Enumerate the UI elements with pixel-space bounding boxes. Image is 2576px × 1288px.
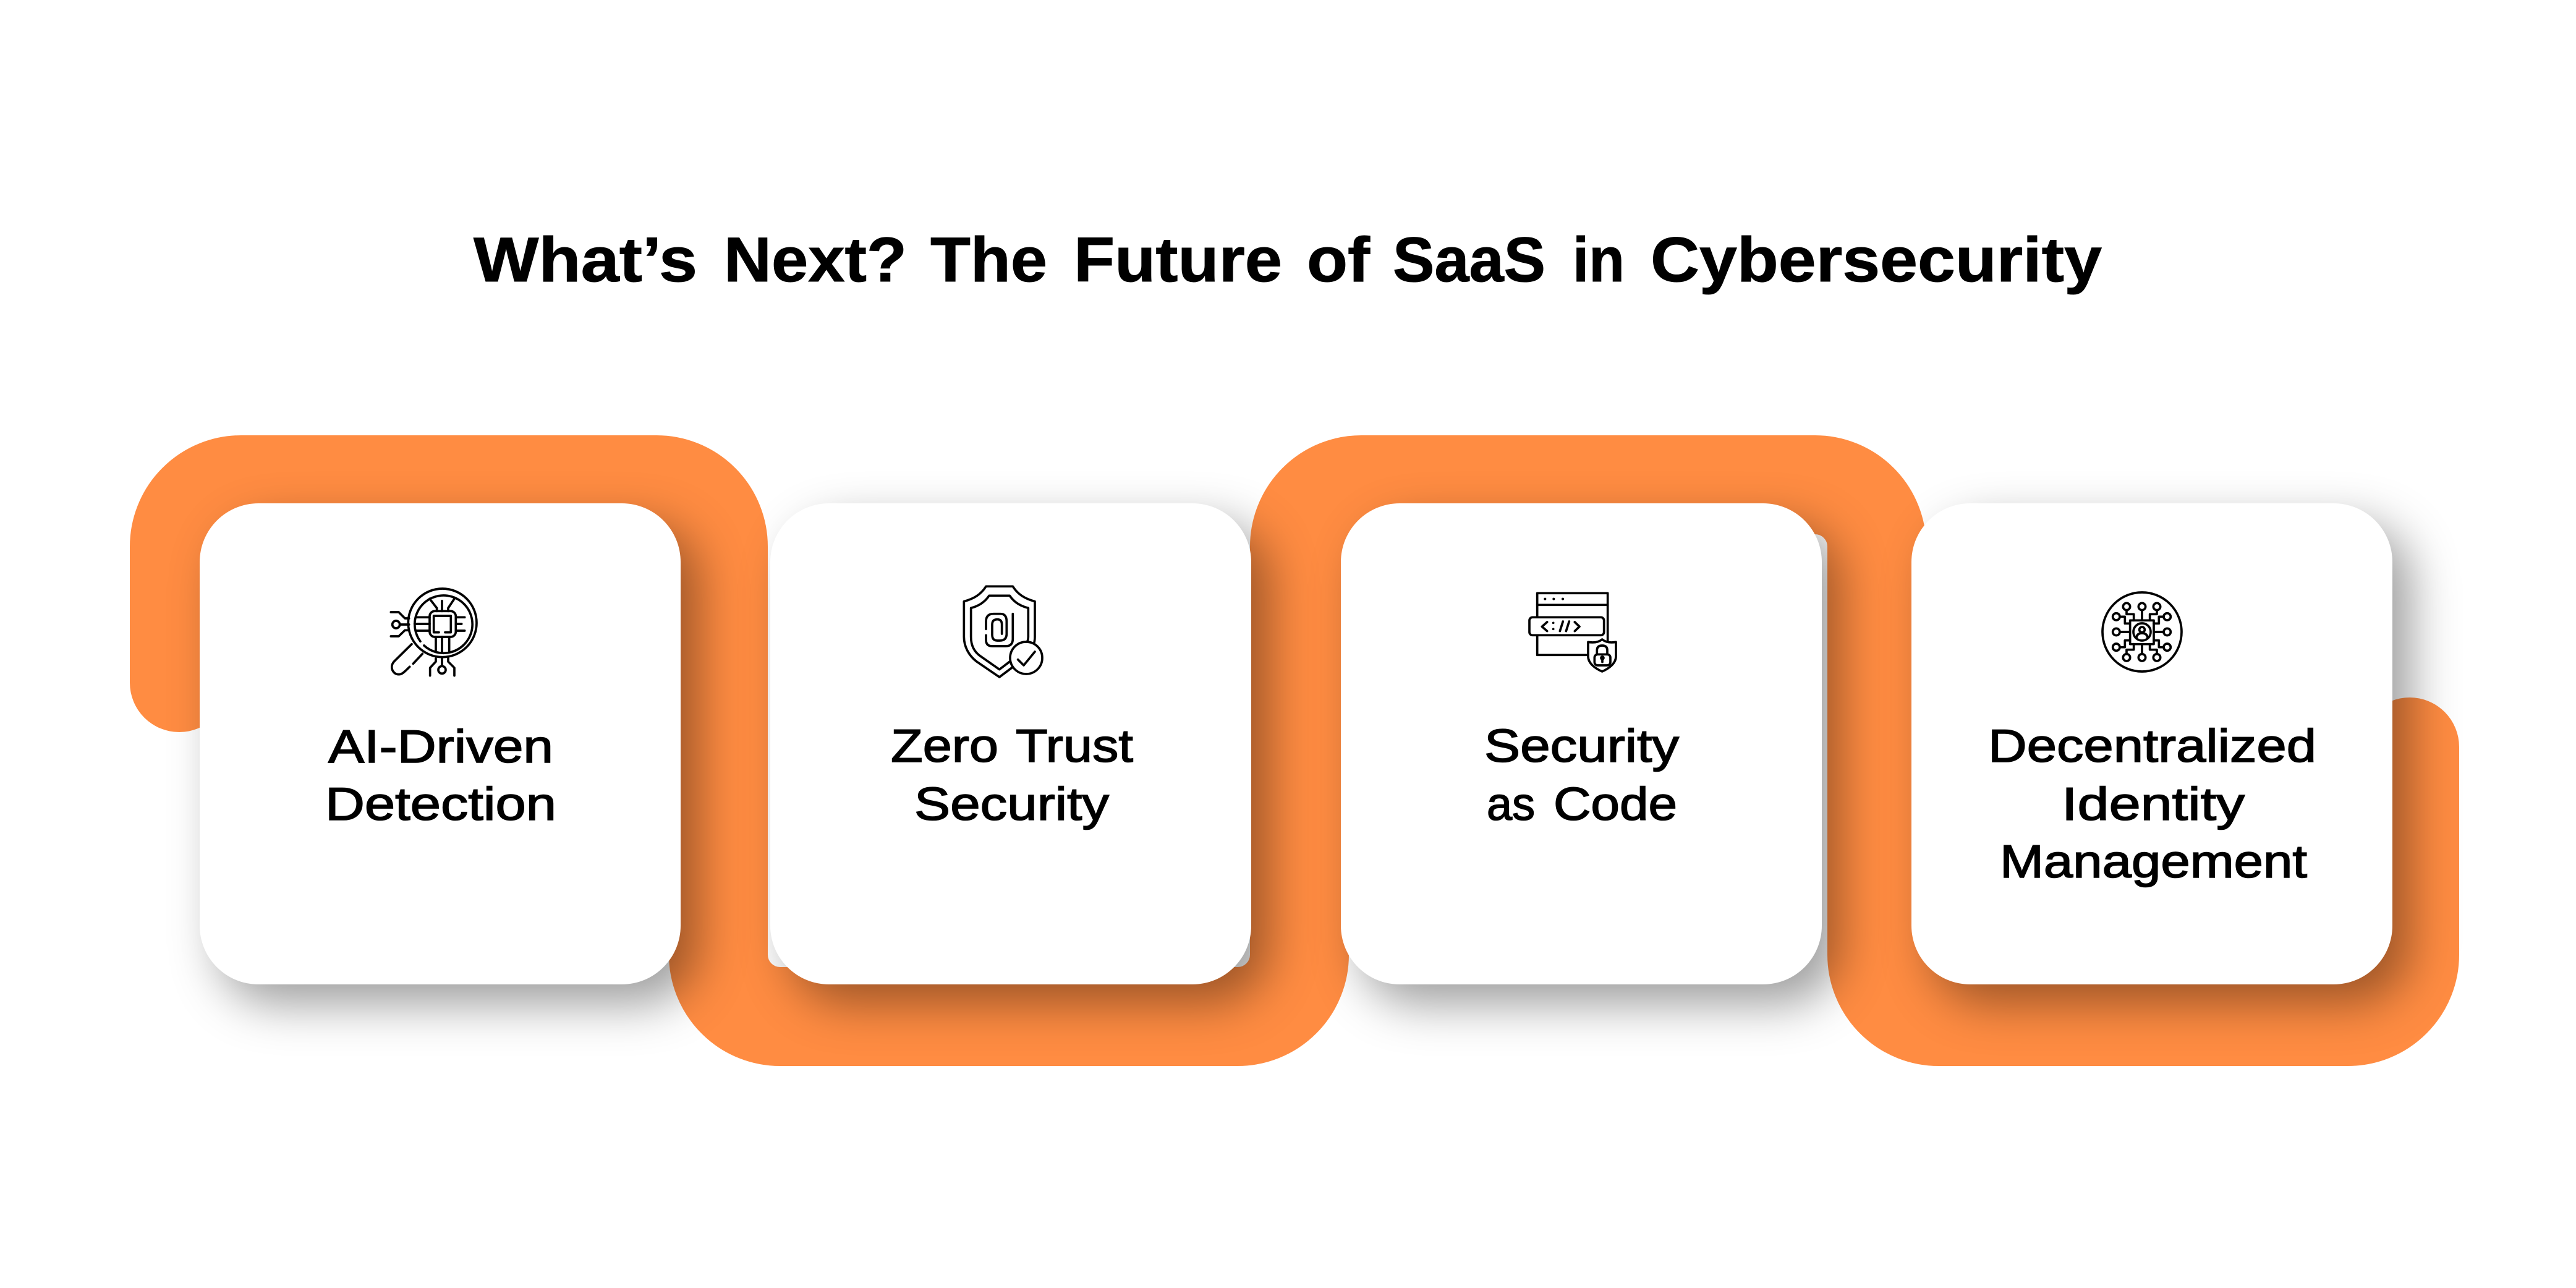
label: Decentralized Identity Management: Management (2000, 835, 2307, 887)
label: Zero Trust Security: Zero (891, 720, 998, 772)
panel: AI-Driven Detection (200, 503, 681, 984)
title: The (930, 224, 1047, 295)
label: Security as Code: as (1487, 778, 1535, 830)
title: in (1573, 224, 1625, 295)
label: Zero Trust Security (891, 720, 1133, 830)
label: Zero Trust Security: Trust (1016, 720, 1133, 772)
label: Decentralized Identity Management: Decentralized (1988, 720, 2316, 772)
title: What’s (474, 224, 697, 295)
label: Decentralized Identity Management: Identity (2062, 778, 2245, 830)
label: Zero Trust Security: Security (914, 778, 1110, 830)
label: Security as Code (1484, 720, 1680, 830)
panel: Zero Trust Security (770, 503, 1251, 984)
title: Cybersecurity (1651, 224, 2102, 295)
title: Future (1074, 224, 1282, 295)
icon: magnifier over chip (391, 589, 477, 676)
icon: identity chip network (2102, 592, 2182, 672)
title: Next? (724, 224, 907, 295)
title (474, 224, 2102, 295)
label: Decentralized Identity Management (1988, 720, 2316, 887)
label: AI-Driven Detection (325, 720, 556, 830)
label: Security as Code: Security (1484, 720, 1680, 772)
label: AI-Driven Detection: AI-Driven (328, 720, 553, 772)
label: Security as Code: Code (1554, 778, 1677, 830)
title: SaaS (1393, 224, 1545, 295)
title: of (1307, 224, 1371, 295)
panel: Security as Code (1341, 503, 1822, 984)
orange snake connector (179, 485, 2410, 1017)
label: AI-Driven Detection: Detection (325, 778, 556, 830)
icon: shield with fingerprint and check (964, 586, 1042, 677)
panel: Decentralized Identity Management (1911, 503, 2392, 984)
icon: code window with lock shield (1529, 593, 1616, 672)
